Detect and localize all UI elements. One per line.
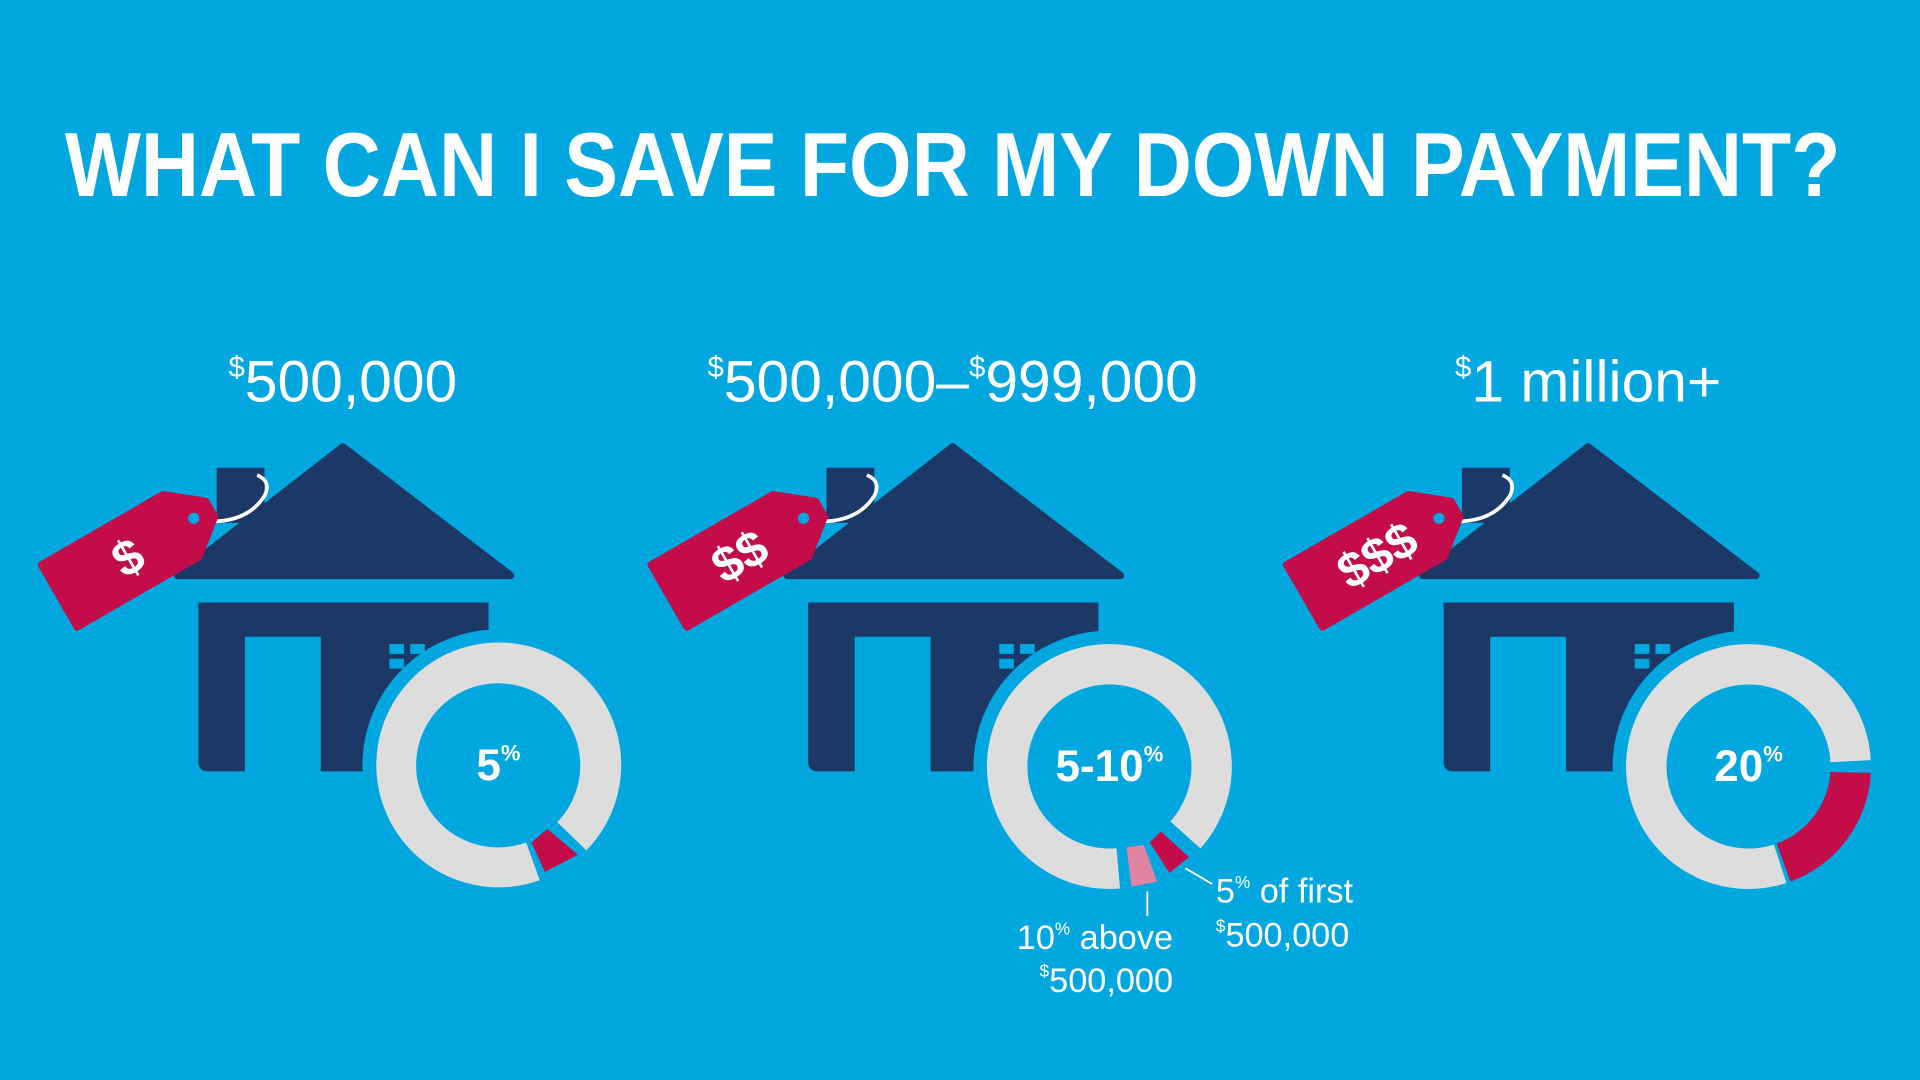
donut 2: 5-10 <box>1055 742 1144 791</box>
donut 3: % <box>1763 742 1783 767</box>
callout: 10% above <box>1017 891 1173 1000</box>
callout: 10% above: 10 <box>1017 919 1055 957</box>
price heading 2: $ <box>708 351 724 384</box>
price heading 2: 999,000 <box>985 350 1198 415</box>
panel: 1 million+ <box>1286 350 1884 902</box>
callout: 5% of first: 500,000 <box>1225 917 1349 955</box>
price tag 3 <box>1286 475 1512 627</box>
callout: 5% of first: of first <box>1250 872 1354 910</box>
callout: 10% above: % <box>1055 918 1070 938</box>
panel: 500k <box>41 350 634 901</box>
callout: 5% of first <box>1185 868 1354 955</box>
price heading 3: $ <box>1455 351 1471 384</box>
callout: 5% of first: % <box>1235 872 1250 892</box>
price tag 3: $$$ <box>1327 510 1427 600</box>
price tag 1: $ <box>102 526 154 589</box>
price heading 2: 500,000– <box>724 350 969 415</box>
price tag 2 <box>651 475 877 627</box>
price heading 1: $ <box>228 351 245 384</box>
donut 1: % <box>501 740 521 765</box>
callout: 10% above: $ <box>1040 961 1050 981</box>
house icon 1 <box>178 447 511 771</box>
donut 3 <box>1613 631 1884 902</box>
donut 3: 20 <box>1714 742 1763 791</box>
price heading 2: $ <box>969 351 985 384</box>
house icon 3 <box>1423 447 1756 771</box>
price heading 3: 1 million+ <box>1471 350 1721 415</box>
callout: 10% above: above <box>1070 919 1173 957</box>
price tag 2: $$ <box>702 518 778 594</box>
price heading 1: 500,000 <box>245 350 457 415</box>
price tag 1 <box>41 475 267 627</box>
callout: 10% above: 500,000 <box>1049 962 1173 1000</box>
donut 1: 5 <box>476 741 501 790</box>
panel: 500k-999k <box>651 350 1354 1000</box>
donut 2: % <box>1144 742 1164 767</box>
callout: 5% of first: $ <box>1216 916 1226 936</box>
house icon 2 <box>787 447 1120 771</box>
donut 1 <box>362 629 634 901</box>
callout: 5% of first: 5 <box>1216 872 1235 910</box>
donut 2 <box>973 631 1245 902</box>
